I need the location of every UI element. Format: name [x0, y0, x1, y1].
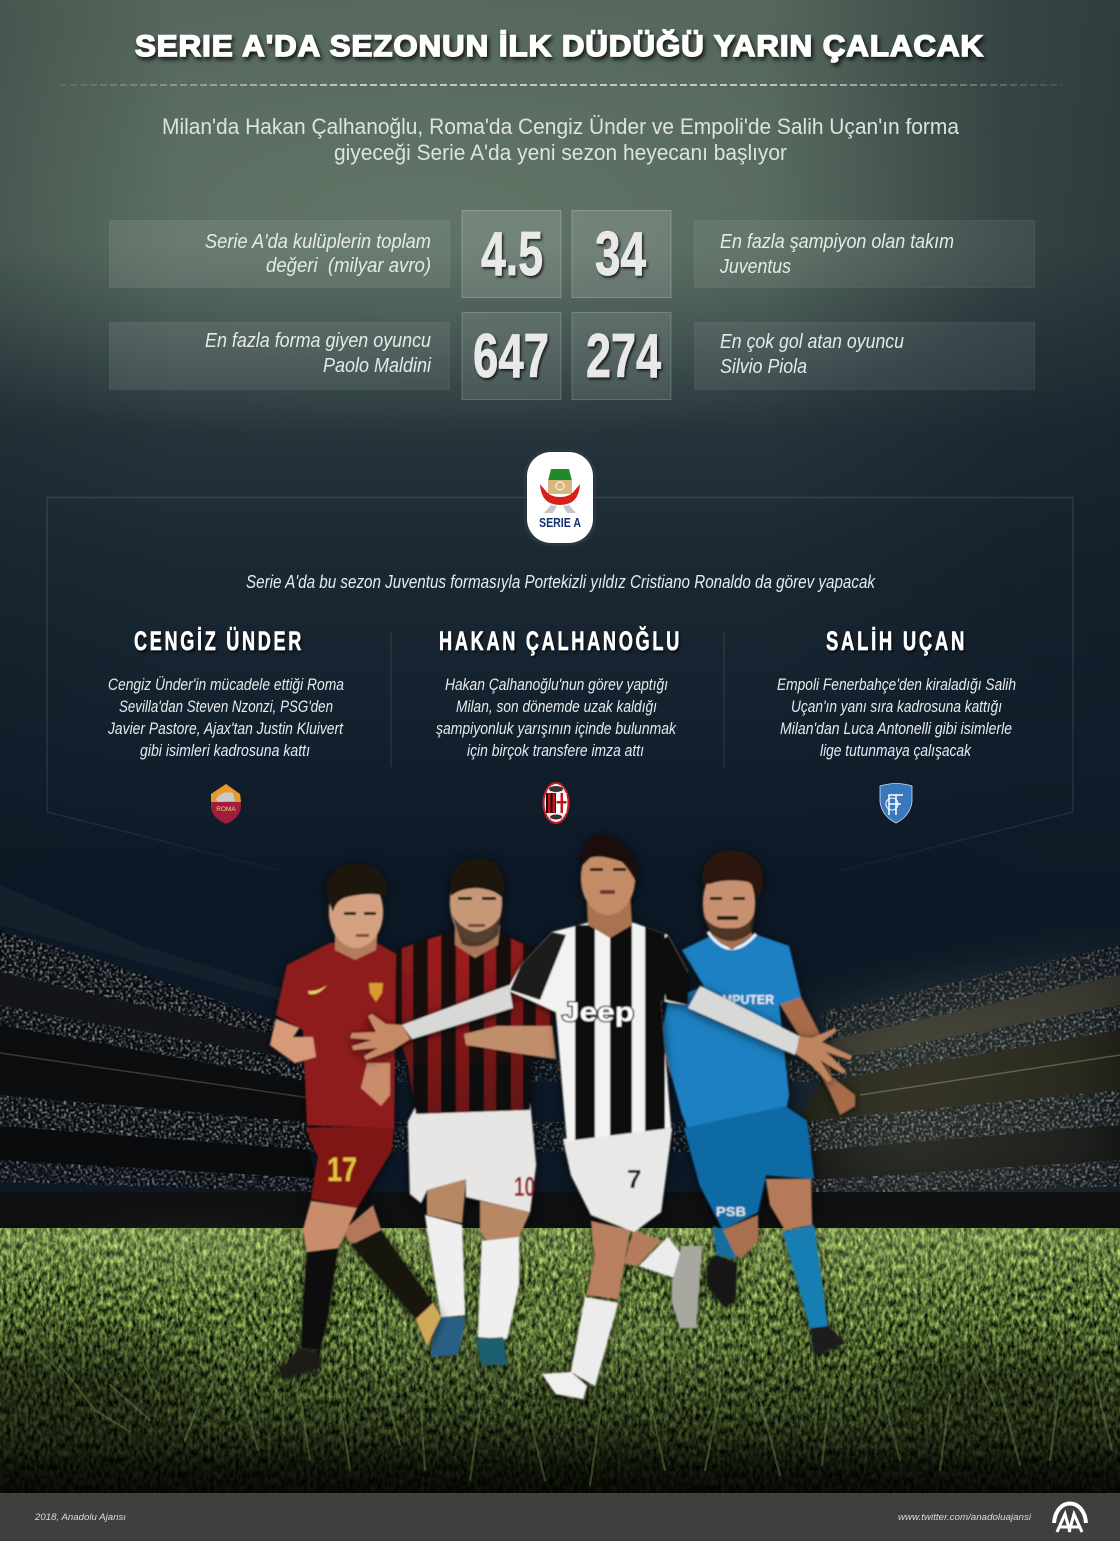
- back sock: [639, 1237, 690, 1281]
- head: [329, 876, 383, 948]
- panel: stats: [110, 210, 1034, 400]
- stat: top scorer: [572, 312, 1034, 400]
- right leg: [766, 1179, 812, 1230]
- right crowd tier 2: [820, 1005, 1120, 1082]
- intro sentence: Serie A'da bu sezon Juventus formasıyla Portekizli yıldız Cristiano Ronaldo da görev yapacak: [246, 572, 876, 592]
- beard: [703, 912, 755, 941]
- face features: [344, 912, 376, 937]
- right lower wall: [800, 1125, 1120, 1180]
- right sock: [478, 1237, 519, 1339]
- left rail: [0, 1053, 310, 1098]
- left lower concrete: [0, 1025, 310, 1122]
- stat: most titles: En fazla şampiyon olan takım: [720, 231, 954, 253]
- column: Salih Uçan: SALİH UÇAN: [826, 626, 967, 656]
- icon: AA logo: [1054, 1504, 1086, 1532]
- stadium stands: [0, 885, 1120, 1230]
- stat: club value: değeri (milyar avro): [266, 255, 431, 277]
- column: Cengiz Ünder: gibi isimleri kadrosuna kattı: [140, 741, 310, 760]
- jersey: [276, 943, 396, 1128]
- neck: [710, 920, 752, 950]
- player: Cengiz Ünder: [270, 863, 441, 1379]
- neck: [587, 895, 632, 938]
- back boot: [707, 1255, 737, 1306]
- right lower concrete: [800, 1030, 1120, 1122]
- stat: top scorer: En çok gol atan oyuncu: [720, 331, 904, 353]
- boot: [542, 1372, 587, 1399]
- sponsor: Jeep: [562, 997, 634, 1027]
- icon: Roma crest: [211, 784, 241, 824]
- left sleeve: [402, 985, 513, 1039]
- player: Cristiano Ronaldo: [350, 835, 852, 1399]
- back leg: [344, 1205, 381, 1246]
- head: [450, 862, 502, 942]
- grass blades: [30, 1340, 1112, 1485]
- jersey: [500, 915, 695, 1145]
- jersey: [394, 932, 556, 1115]
- left sock: [425, 1215, 465, 1317]
- stat: club value: Serie A'da kulüplerin toplam: [205, 231, 431, 253]
- subtitle: Milan'da Hakan Çalhanoğlu, Roma'da Cengiz Ünder ve Empoli'de Salih Uçan'ın forma: [162, 114, 960, 139]
- hair: [582, 835, 638, 884]
- arm right: [779, 997, 855, 1115]
- face features: [458, 897, 496, 927]
- right crowd tier 3: [800, 1090, 1120, 1152]
- front sock: [571, 1297, 618, 1386]
- right rail: [860, 1055, 1120, 1095]
- right sock: [783, 1225, 828, 1330]
- arm: [270, 1019, 316, 1063]
- left crowd tier 2: [0, 1005, 310, 1082]
- collar: [708, 932, 756, 949]
- left hand: [350, 1014, 410, 1060]
- right boot: [476, 1337, 507, 1365]
- center crowd lower: [310, 1122, 810, 1152]
- right crowd tier 4: [810, 1160, 1120, 1196]
- stat: club value: [110, 210, 561, 298]
- column: Hakan Çalhanoğlu: [436, 625, 682, 824]
- column: Cengiz Ünder: CENGİZ ÜNDER: [134, 626, 304, 656]
- left lower wall: [0, 1126, 315, 1178]
- back sock: [351, 1230, 433, 1319]
- neck: [455, 925, 500, 958]
- player: Salih Uçan: [661, 851, 855, 1355]
- divider: [723, 633, 725, 767]
- face features: [710, 897, 745, 920]
- column: Hakan Çalhanoğlu: şampiyonluk yarışının içinde bulunmak: [436, 719, 677, 738]
- column: Salih Uçan: Uçan'ın yanı sıra kadrosuna kattığı: [791, 697, 1002, 716]
- left crowd tier 4: [0, 1160, 315, 1192]
- right stand concrete: [820, 975, 1120, 1062]
- shorts sponsor: PSB: [716, 1204, 746, 1219]
- icon: Empoli crest: [880, 784, 912, 823]
- left crowd tier 3: [0, 1095, 310, 1150]
- shorts: [408, 1102, 536, 1212]
- grass field: [0, 1228, 1120, 1493]
- left roof structure: [0, 885, 280, 1000]
- column: Cengiz Ünder: [107, 626, 344, 824]
- players group: [270, 835, 855, 1399]
- right leg: [480, 1201, 530, 1248]
- stat: most appearances: En fazla forma giyen oyuncu: [205, 330, 431, 352]
- head: [581, 841, 635, 915]
- icon: Serie A logo: SERIE A: [539, 515, 581, 530]
- hair: [326, 863, 386, 912]
- grass light patch: [70, 1241, 1030, 1370]
- column: Cengiz Ünder: Sevilla'dan Steven Nzonzi, PSG'den: [119, 697, 333, 716]
- hair: [703, 851, 763, 900]
- column: Cengiz Ünder: Javier Pastore, Ajax'tan Justin Kluivert: [107, 719, 344, 738]
- stat: most appearances: [110, 312, 561, 400]
- column: Cengiz Ünder: Cengiz Ünder'in mücadele ettiği Roma: [108, 675, 344, 694]
- title: SERIE A'DA SEZONUN İLK DÜDÜĞÜ YARIN ÇALACAK: [135, 29, 984, 63]
- stat: top scorer: Silvio Piola: [720, 356, 807, 378]
- shorts: [563, 1128, 672, 1232]
- arm over belly: [464, 1026, 556, 1059]
- crest: [369, 983, 383, 1002]
- left boot: [431, 1317, 466, 1357]
- icon: Serie A logo: [524, 449, 596, 546]
- front leg: [303, 1201, 357, 1252]
- column: Salih Uçan: Milan'dan Luca Antonelli gibi isimlerle: [780, 719, 1012, 738]
- column: Hakan Çalhanoğlu: HAKAN ÇALHANOĞLU: [439, 625, 682, 656]
- beard: [452, 915, 501, 947]
- right hand: [796, 1028, 852, 1082]
- shirt number: 17: [327, 1151, 357, 1189]
- column: Salih Uçan: lige tutunmaya çalışacak: [820, 741, 972, 760]
- back leg: [624, 1230, 661, 1266]
- stat: most titles: Juventus: [719, 256, 791, 278]
- column: Hakan Çalhanoğlu: Hakan Çalhanoğlu'nun görev yaptığı: [445, 675, 668, 694]
- back sock: [713, 1226, 737, 1259]
- head: [703, 865, 755, 941]
- icon: Roma crest: ROMA: [216, 806, 236, 813]
- front boot: [279, 1348, 320, 1379]
- back boot: [672, 1246, 702, 1328]
- left crowd tier 1: [0, 930, 280, 1037]
- column: Salih Uçan: [777, 626, 1016, 823]
- back boot: [416, 1303, 441, 1346]
- arm left: [661, 1045, 727, 1126]
- stat: most appearances: 647: [473, 322, 549, 391]
- right sleeve: [688, 986, 801, 1055]
- grass shadow patches: [0, 1335, 1120, 1435]
- panel: frame: [47, 498, 1073, 872]
- left leg: [427, 1179, 466, 1223]
- right crowd tier 1: [820, 945, 1120, 1040]
- right boot: [811, 1326, 846, 1355]
- stat: top scorer: 274: [586, 322, 661, 391]
- column: Hakan Çalhanoğlu: Milan, son dönemde uzak kaldığı: [456, 697, 657, 716]
- shorts: [306, 1126, 394, 1208]
- footer bar: [0, 1493, 1120, 1541]
- shorts: [684, 1106, 814, 1230]
- footer url: www.twitter.com/anadoluajansi: [898, 1512, 1032, 1523]
- player: Hakan Çalhanoğlu: [385, 858, 560, 1365]
- neck: [335, 925, 378, 960]
- footer credit: 2018, Anadolu Ajansı: [34, 1512, 126, 1523]
- divider: dashed: [60, 84, 1062, 86]
- sponsor: MPUTER: [722, 992, 775, 1007]
- swoosh: [308, 985, 327, 994]
- front leg: [587, 1221, 630, 1299]
- column: Salih Uçan: Empoli Fenerbahçe'den kiraladığı Salih: [777, 675, 1016, 694]
- left stands concrete: [0, 972, 310, 1062]
- stat: most titles: 34: [595, 220, 646, 289]
- stat: most appearances: Paolo Maldini: [323, 355, 431, 377]
- face features: [590, 868, 626, 894]
- icon: Milan crest: [542, 782, 570, 824]
- front sock: [301, 1248, 338, 1350]
- center crowd: [310, 1060, 820, 1082]
- column: Hakan Çalhanoğlu: için birçok transfere imza attı: [467, 741, 644, 760]
- jersey: [661, 934, 801, 1135]
- subtitle: giyeceği Serie A'da yeni sezon heyecanı başlıyor: [334, 140, 787, 165]
- stat: most titles: [572, 210, 1034, 298]
- divider: [390, 633, 392, 767]
- back leg: [723, 1215, 758, 1257]
- light haze: [800, 950, 1120, 1200]
- shirt number: 10: [514, 1171, 535, 1202]
- subtitle: [162, 114, 960, 165]
- stat: club value: 4.5: [481, 220, 543, 289]
- bottom wall: [0, 1192, 1120, 1230]
- shirt number: 7: [627, 1164, 641, 1194]
- forearm: [361, 1063, 390, 1106]
- hair: [450, 858, 504, 899]
